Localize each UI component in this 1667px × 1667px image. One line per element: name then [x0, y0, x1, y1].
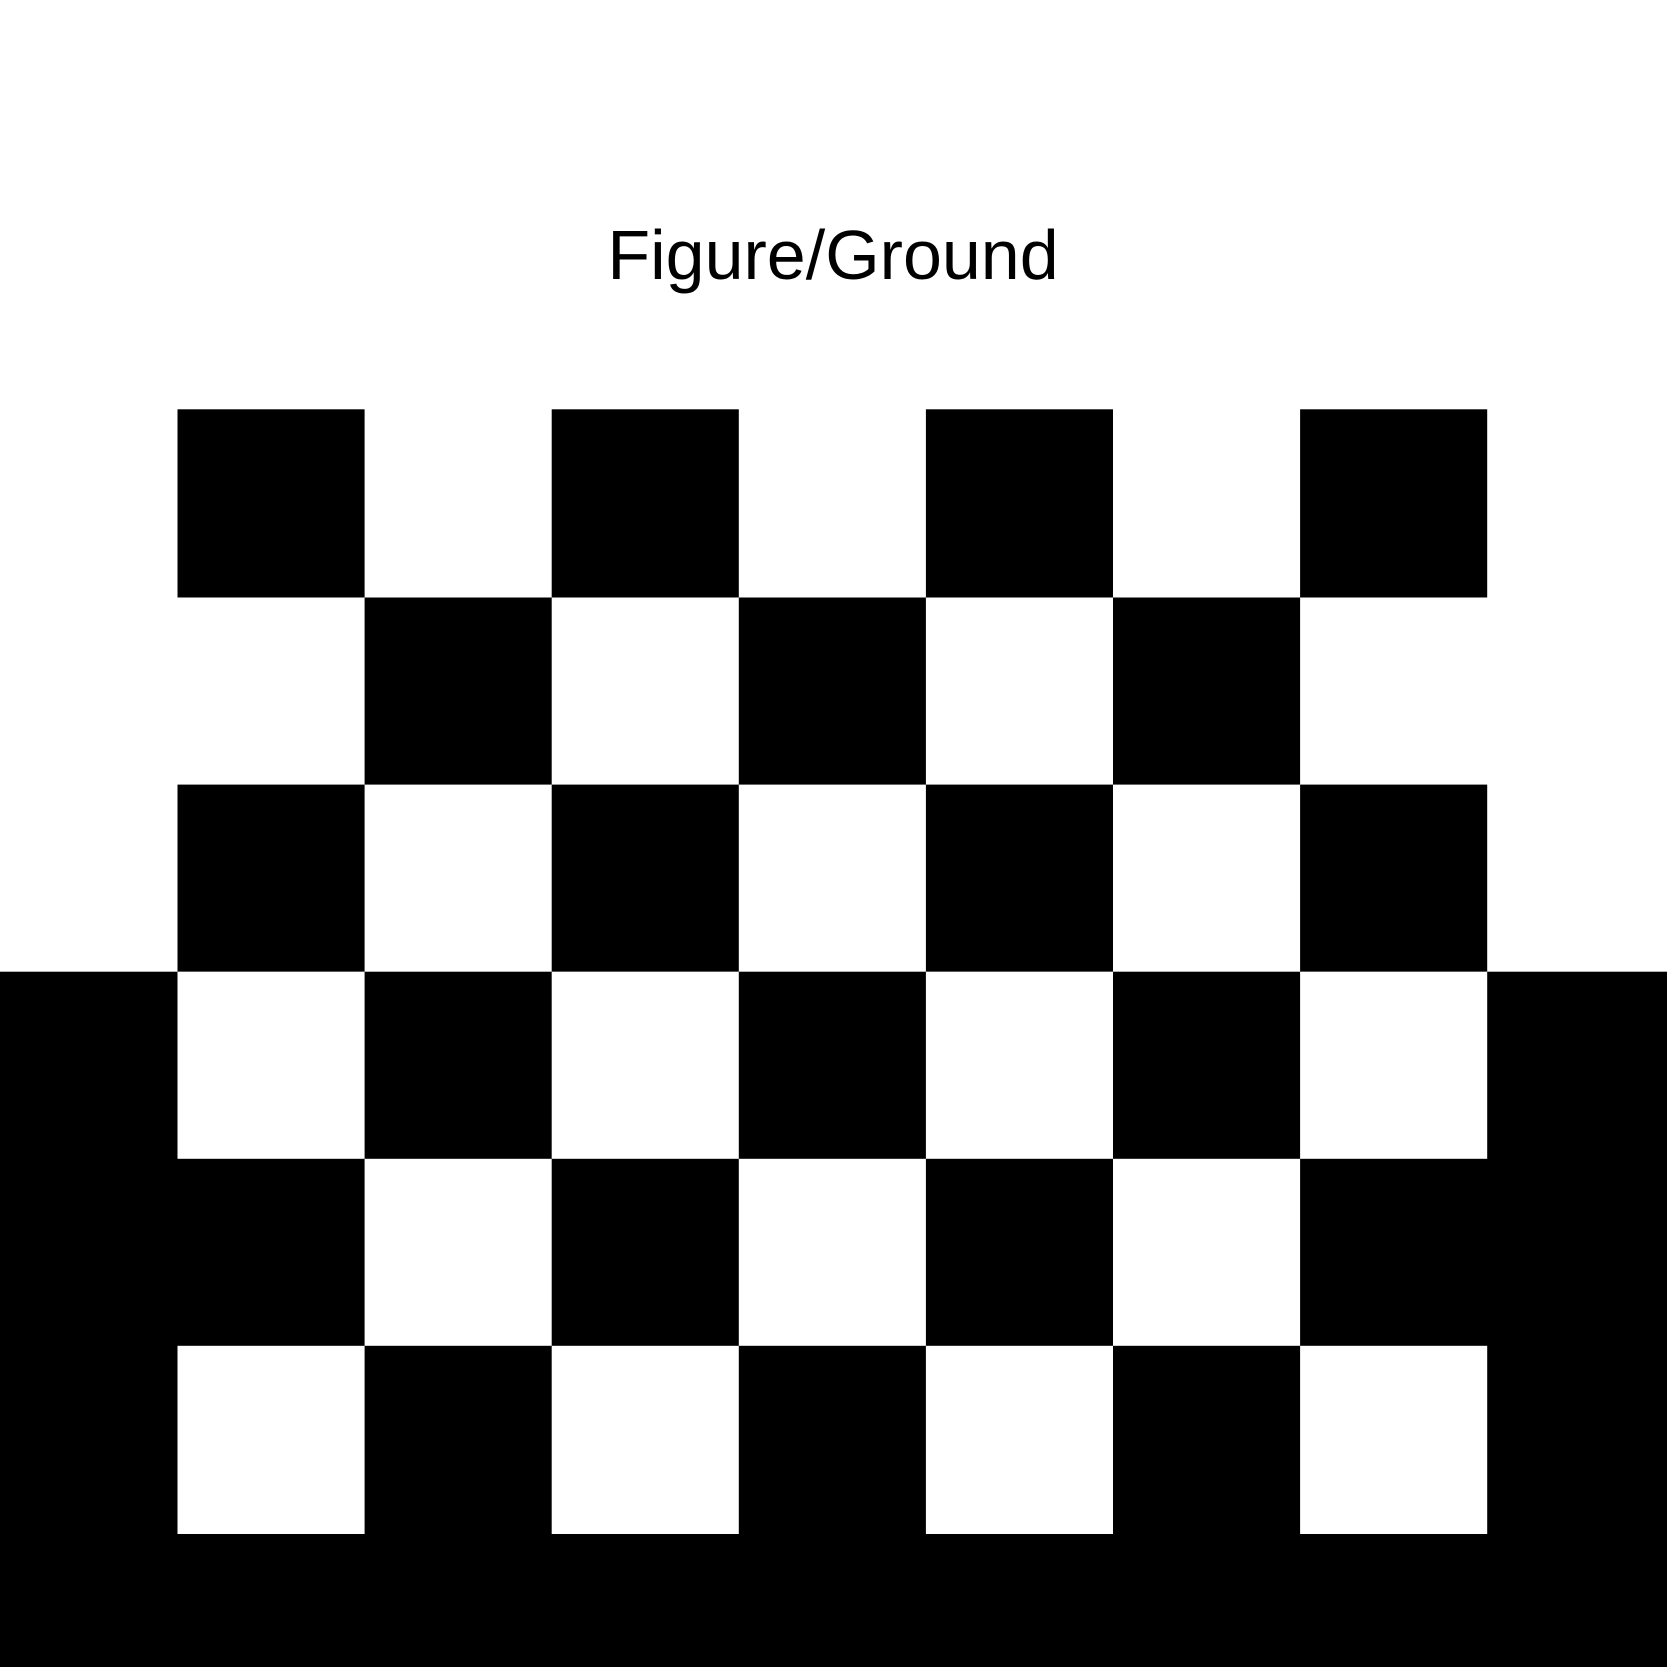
checkerboard pattern: [178, 409, 1487, 1534]
title: Figure/Ground: [607, 216, 1059, 294]
row 3 black squares: [178, 785, 1487, 972]
ground: black lower band: [0, 972, 1667, 1667]
row 5 white squares: [365, 1159, 1300, 1346]
row 4 white squares: [178, 972, 1487, 1159]
row 6 white squares: [178, 1346, 1487, 1534]
row 2 black squares: [365, 598, 1300, 785]
row 1 black squares: [178, 409, 1487, 598]
